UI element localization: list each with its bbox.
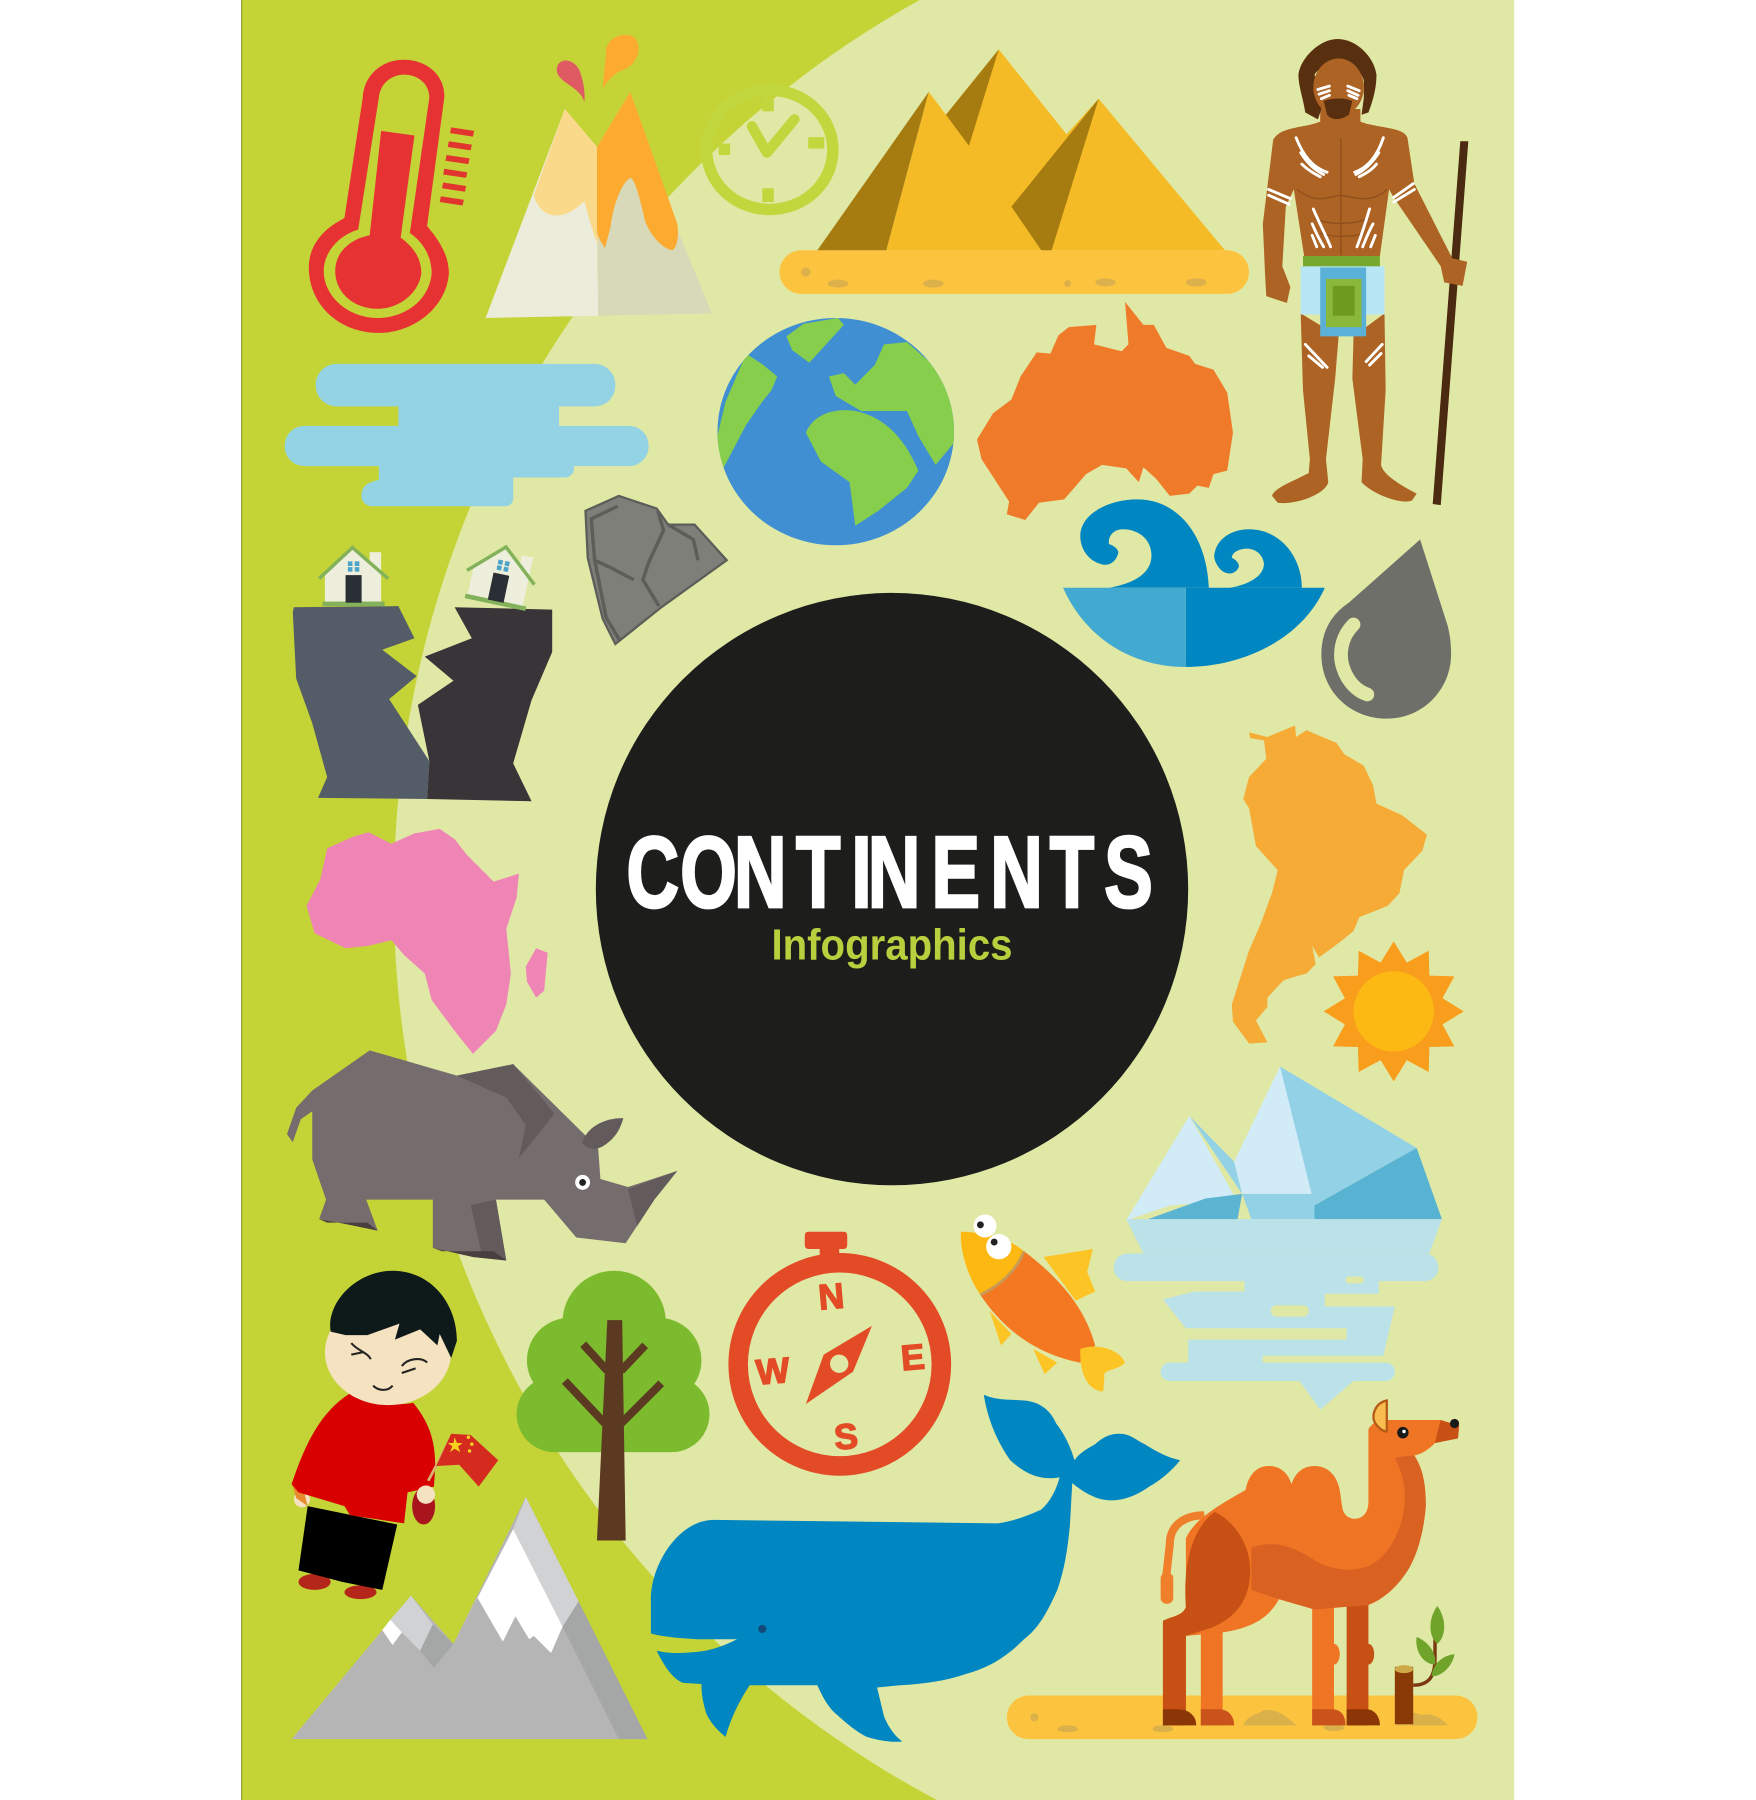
icon: sapling (1395, 1606, 1455, 1724)
icon: desert pyramids (780, 49, 1249, 294)
icon: aboriginal man with spear (1263, 39, 1468, 505)
icon: Australia map (977, 302, 1233, 520)
icon: oil drop (1321, 540, 1451, 719)
icon: tree (517, 1271, 709, 1541)
title circle (596, 593, 1188, 1185)
icon: left house (319, 548, 388, 606)
icon: rhinoceros (287, 1050, 677, 1260)
icon: blue whale (651, 1395, 1180, 1742)
compass letter E: E (899, 1337, 926, 1378)
icon: right house tilted (461, 540, 541, 612)
icon: South America map (1232, 726, 1427, 1043)
icon: snowy mountains (292, 1497, 647, 1739)
icon: rock (585, 496, 727, 644)
icon: fish (961, 1215, 1125, 1391)
compass letter S: S (832, 1416, 860, 1458)
icon: Africa map (307, 829, 548, 1054)
icon: compass (738, 1232, 941, 1466)
subheading: Infographics: Infographics (771, 922, 1013, 970)
compass letter W: W (754, 1350, 792, 1393)
icon: clock (707, 90, 833, 210)
icon: ocean wave (1063, 499, 1325, 667)
icon: earthquake cliff with houses (293, 540, 552, 801)
compass letter N: N (817, 1276, 846, 1318)
icon: rain cloud streaks (285, 364, 649, 506)
book cover illustration (241, 0, 1514, 1800)
heading: CONTINENTS: CONTINENTS (627, 815, 1153, 929)
icon: camel on sand (1007, 1401, 1477, 1739)
icon: sun (1324, 941, 1464, 1081)
icon: boy with Chinese flag (292, 1271, 498, 1599)
icon: thermometer (309, 60, 474, 333)
icon: erupting volcano (486, 35, 712, 318)
icon: iceberg with reflection (1114, 1066, 1442, 1410)
icon: globe (712, 318, 964, 545)
